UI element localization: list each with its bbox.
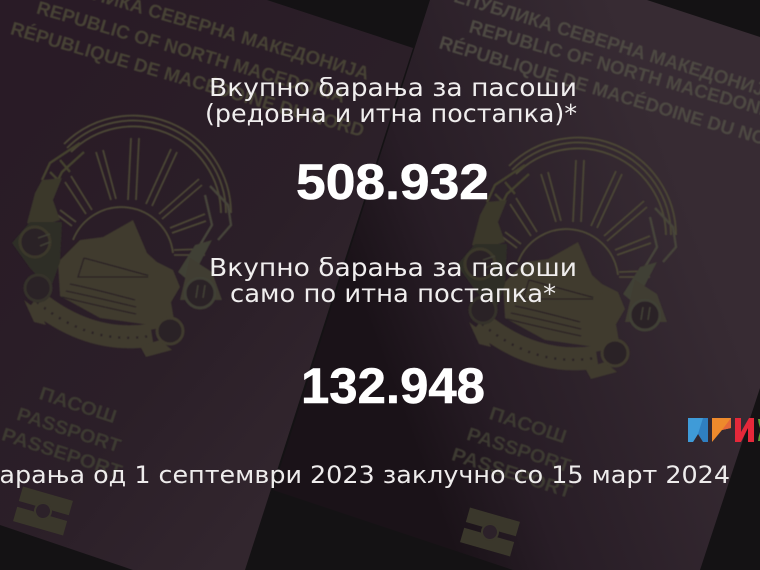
heading: total passport requests: (редовна и итна постапка)*: [205, 99, 577, 128]
heading: urgent procedure requests: само по итна постапка*: [230, 279, 556, 308]
logo: MKD mark: [688, 418, 760, 442]
footnote: date range: Барања од 1 септември 2023 заклучно со 15 март 2024: [0, 461, 730, 489]
passport label text: right: [449, 403, 575, 503]
icon: coat of arms, left: [12, 116, 231, 357]
passport label text: right: PASSPORT: [464, 424, 574, 478]
icon: biometric chip, left: [13, 487, 73, 535]
heading: total passport requests: [205, 73, 577, 128]
passport label text: left: PASSPORT: [14, 404, 124, 458]
passport label text: left: PASSEPORT: [0, 424, 125, 483]
number: total requests: 508.932: [296, 154, 489, 210]
panel: left passport: [0, 0, 413, 570]
panel: right passport: [273, 0, 760, 570]
passport label text: right: PASSEPORT: [449, 444, 575, 503]
heading: urgent procedure requests: Вкупно барања за пасоши: [209, 253, 577, 282]
number: urgent requests: 132.948: [301, 358, 485, 414]
passport label text: right: ПАСОШ: [486, 403, 569, 448]
passport cover: left: [0, 0, 413, 570]
icon: biometric chip, right: [460, 508, 520, 556]
heading: total passport requests: Вкупно барања за пасоши: [209, 73, 577, 102]
passport label text: left: [0, 383, 125, 483]
passport title text: left: REPUBLIC OF NORTH MACEDONIA: [34, 0, 348, 107]
passport title text: left: RÉPUBLIQUE DE MACÉDOINE DU NORD: [8, 18, 367, 141]
passport cover: right: [273, 0, 760, 570]
icon: coat of arms, right: [457, 138, 676, 379]
passport label text: left: ПАСОШ: [36, 383, 119, 428]
heading: urgent procedure requests: [209, 253, 577, 308]
